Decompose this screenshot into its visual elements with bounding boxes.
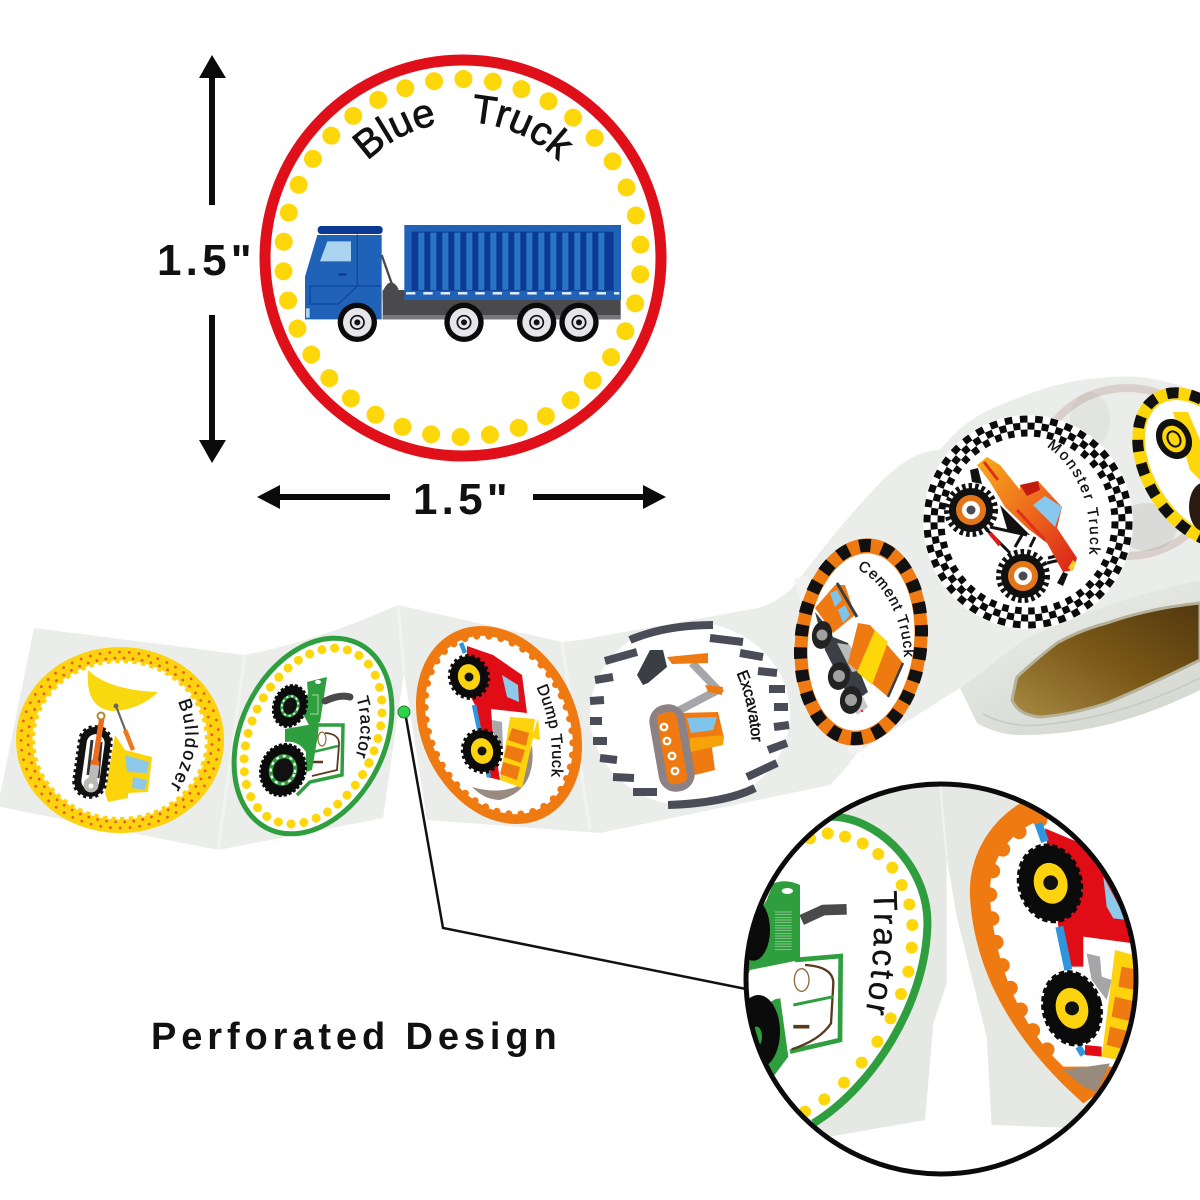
- tractor cab: [297, 725, 343, 795]
- sticker title: Blue Truck: Blue Truck: [352, 94, 574, 162]
- label: Excavator: [736, 670, 761, 742]
- zoomed tractor sticker: Tractor: [866, 890, 898, 1016]
- magnifier callout: [744, 782, 1138, 1176]
- blue truck sticker large: [260, 54, 666, 462]
- roll core: [1012, 603, 1200, 717]
- track: [647, 702, 697, 794]
- blade: [88, 670, 158, 711]
- height label: 1.5": [157, 236, 256, 285]
- wheels: [949, 488, 993, 532]
- width arrow left: [257, 485, 390, 509]
- width arrow right: [533, 485, 666, 509]
- perforation gap: [925, 857, 992, 1127]
- truck body: [467, 646, 527, 780]
- dump bed: [500, 717, 540, 788]
- perforation marker dot: [398, 706, 410, 718]
- cab: [678, 712, 724, 775]
- label: Monster Truck: [1048, 438, 1101, 555]
- perforated design caption: Perforated Design: [151, 1016, 562, 1058]
- label: Dump Truck: [536, 684, 564, 778]
- zoomed tractor sticker: [748, 814, 932, 1126]
- mixer: [848, 623, 903, 697]
- sticker: partial striped sticker: [1132, 387, 1200, 544]
- sticker: excavator: [590, 621, 790, 809]
- illustration: blue truck: [305, 225, 621, 342]
- label: Cement Truck: [859, 562, 914, 658]
- backing paper strip: [0, 376, 1200, 850]
- border stripes: [590, 625, 789, 805]
- leader line from perforation to callout: [405, 712, 746, 989]
- wheels: [810, 619, 834, 651]
- chassis: [815, 612, 868, 698]
- suspension: [987, 527, 1060, 563]
- truck body: [977, 457, 1077, 572]
- tractor hood: [302, 677, 327, 727]
- tractor body: [285, 723, 319, 772]
- wheels: [445, 652, 493, 702]
- height arrow top: [199, 55, 226, 205]
- ground: [472, 745, 533, 800]
- sticker roll body: [960, 578, 1200, 735]
- cab: [815, 585, 855, 633]
- label: Tractor: [356, 695, 372, 759]
- sticker: bulldozer: [16, 647, 224, 833]
- track: [72, 725, 113, 799]
- sticker: dump truck: [416, 626, 582, 824]
- height arrow bottom: [199, 315, 226, 463]
- sticker: monster truck: [923, 415, 1133, 629]
- width label: 1.5": [413, 475, 512, 524]
- sticker: cement truck: [794, 538, 928, 746]
- zoomed dump truck sticker: [970, 804, 1134, 1104]
- body: [105, 735, 152, 802]
- wheels: [268, 681, 312, 731]
- arm: [678, 663, 718, 711]
- show-through of next sticker: [1037, 388, 1200, 556]
- label: Bulldozer: [171, 698, 199, 792]
- sticker: tractor: [232, 636, 394, 836]
